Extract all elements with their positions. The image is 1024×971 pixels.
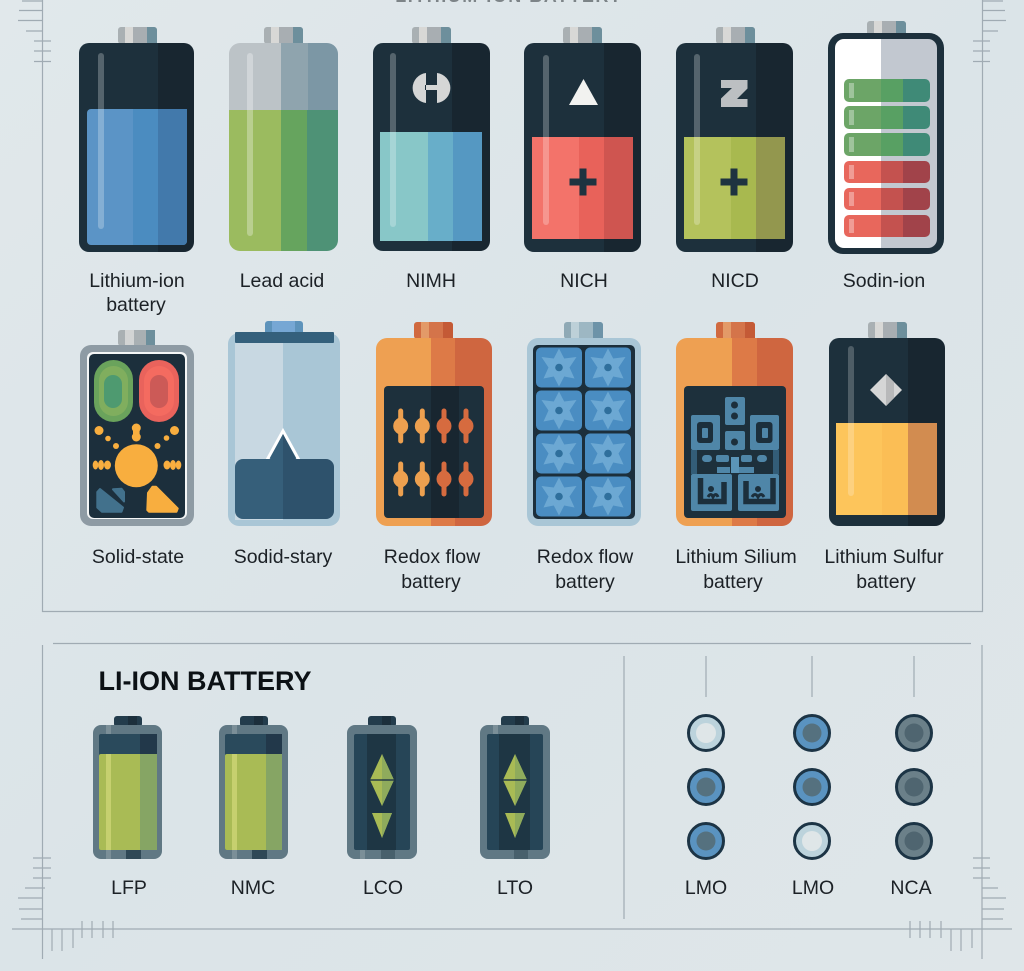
battery: NICD (676, 27, 793, 292)
panel: battery types (18, 0, 1006, 612)
column: LMO second: LMO (792, 877, 834, 899)
battery: LTO: LTO (497, 877, 533, 899)
column: NCA (890, 656, 932, 899)
icon: electrolyte with peak (235, 431, 334, 519)
battery: Redox flow (blue): Redox flow (537, 546, 634, 568)
column: NCA: NCA (890, 877, 932, 899)
icon: sun with rays (93, 424, 181, 487)
battery: Lithium-ion: Lithium-ion (89, 270, 185, 292)
icon: green cell (94, 360, 133, 422)
icon: plus (570, 168, 596, 196)
battery: Lithium Silium: battery (703, 571, 763, 593)
battery: Sodid-stary: Sodid-stary (234, 546, 333, 568)
battery: Sodin-ion (828, 21, 944, 292)
panel frame and ruler ticks (12, 644, 1012, 959)
battery: Lead acid (229, 27, 338, 292)
battery: Redox flow (blue) (527, 322, 641, 593)
icon: yellow wedge (147, 487, 178, 512)
battery: NMC: NMC (231, 877, 275, 899)
icon: red cell (139, 360, 179, 422)
battery: LFP: LFP (111, 877, 147, 899)
battery: LFP (93, 716, 162, 899)
column: LMO first: LMO (685, 877, 727, 899)
heading: LI-ION BATTERY (99, 666, 311, 696)
icon: circuit maze (691, 397, 779, 511)
icon: triangle (569, 79, 598, 105)
battery: LCO: LCO (363, 877, 403, 899)
battery: Lithium-ion: battery (106, 294, 166, 316)
battery: Redox flow (orange): battery (401, 571, 461, 593)
battery: Lithium Silium (675, 322, 797, 593)
icon: teal shards (97, 489, 124, 512)
battery: Lead acid: Lead acid (240, 270, 324, 292)
battery: NICD: NICD (711, 270, 759, 292)
panel: Li-ion battery (12, 644, 1012, 959)
battery: Sodid-stary (228, 321, 340, 568)
battery: Sodin-ion: Sodin-ion (843, 270, 925, 292)
battery: Solid-state: Solid-state (92, 546, 184, 568)
battery: Lithium Silium: Lithium Silium (675, 546, 797, 568)
battery: Redox flow (blue): battery (555, 571, 615, 593)
battery: NICH (524, 27, 641, 292)
battery: Redox flow (orange) (376, 322, 492, 593)
icon: plus (720, 168, 748, 196)
icon: diamond arrows (370, 754, 394, 838)
icon: H symbol (413, 73, 450, 103)
battery: Lithium Sulfur (824, 322, 945, 593)
battery: Solid-state (80, 330, 194, 568)
battery: Lithium-ion (79, 27, 194, 316)
battery: Redox flow (orange): Redox flow (384, 546, 481, 568)
column: LMO first (685, 656, 727, 899)
battery: LCO (347, 716, 417, 899)
battery: NIMH (373, 27, 490, 292)
battery: NICH: NICH (560, 270, 608, 292)
battery: Lithium Sulfur: Lithium Sulfur (824, 546, 944, 568)
column: LMO second (792, 656, 834, 899)
icon: diamond (870, 374, 902, 406)
icon: star cells (536, 348, 631, 516)
battery: NMC (219, 716, 288, 899)
panel frame and ruler ticks (18, 0, 1006, 612)
battery: Lithium Sulfur: battery (856, 571, 916, 593)
icon: flow spindles (393, 408, 474, 496)
icon: Z symbol (721, 80, 748, 107)
battery: LTO (480, 716, 550, 899)
battery: NIMH: NIMH (406, 270, 456, 292)
icon: diamond arrows (503, 754, 527, 838)
